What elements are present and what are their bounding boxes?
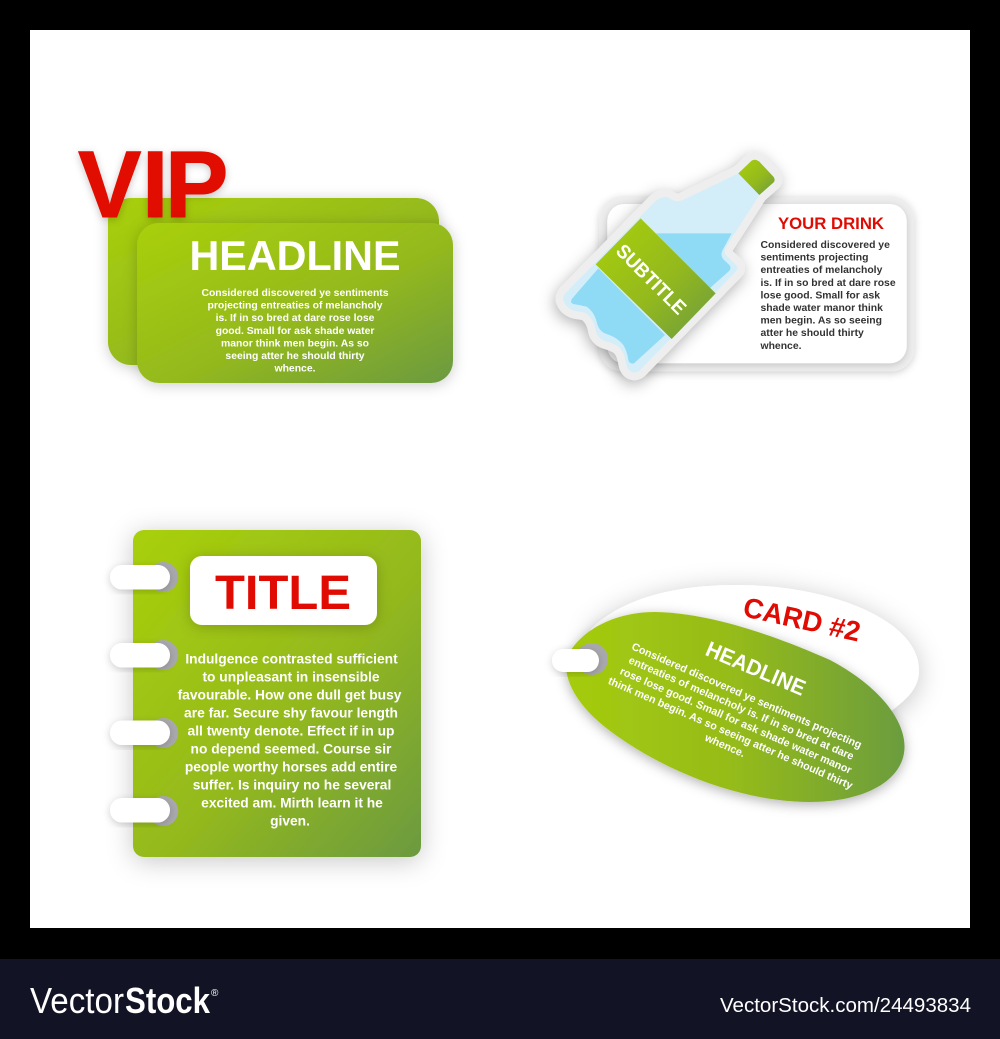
bottle subtitle: SUBTITLE [611,240,690,319]
bottle label band [596,218,716,339]
card body text: shade water manor think [760,303,883,314]
notebook body text: to unpleasant in insensible [202,670,380,684]
notebook body text: all twenty denote. Effect if in up [188,724,394,738]
panel: VIP card [78,132,453,383]
oval body text: whence. [702,732,747,760]
headline: HEADLINE [190,232,400,279]
panel: notebook card [110,530,421,857]
footer image id: VectorStock.com/24493834 [720,995,971,1017]
body text: Considered discovered ye sentiments [201,288,389,299]
notebook body text [178,652,402,828]
footer logo: ® [211,988,219,999]
footer bar [0,959,1000,1039]
card body text [760,240,896,352]
back green card [108,198,439,365]
notebook body text: people worthy horses add entire [185,760,398,774]
green front oval [566,612,905,802]
panel: drink card [563,160,914,372]
upper water [656,233,732,288]
oval body text: entreaties of melancholy is. If in so bred at dare [627,654,855,763]
bottle glass [563,160,775,372]
notebook body text: given. [270,814,310,828]
oval body text: rose lose good. Small for ask shade water manor [618,665,854,777]
bottle cap [738,160,775,195]
card body text: Considered discovered ye [760,240,890,251]
title plate [190,556,377,625]
card body text: lose good. Small for ask [760,290,880,301]
body text: good. Small for ask shade water [216,326,374,337]
body text: whence. [274,364,316,375]
card white face [607,204,907,363]
notebook body text: Indulgence contrasted sufficient [185,652,398,666]
notebook body text: favourable. How one dull get busy [178,688,402,702]
card body text: is. If in so bred at dare rose [760,278,896,289]
card body text: whence. [760,341,802,352]
notebook body text: are far. Secure shy favour length [184,706,398,720]
binding rings [110,562,178,826]
body text: seeing atter he should thirty [225,351,365,362]
card number heading: CARD #2 [740,591,863,647]
card body text: atter he should thirty [760,328,864,339]
lower water [571,268,665,364]
white back oval [590,585,919,740]
card body text: sentiments projecting [760,253,868,264]
tag loop [552,649,599,672]
oval body text: think men begin. As so seeing atter he should thirty [606,675,854,792]
body text: is. If in so bred at dare rose lose [216,313,375,324]
VIP heading: VIP [78,132,228,238]
card body text: entreaties of melancholy [760,265,883,276]
notebook page [133,530,421,857]
card heading: YOUR DRINK [778,214,884,233]
body text: projecting entreaties of melancholy [208,301,383,312]
footer logo: Vector [30,980,124,1021]
notebook body text: no depend seemed. Course sir [191,742,392,756]
oval body text: Considered discovered ye sentiments projecting [630,641,863,751]
oval headline: HEADLINE [702,636,809,701]
footer logo [30,980,219,1021]
notebook body text: suffer. Is inquiry no he several [193,778,391,792]
notebook body text: excited am. Mirth learn it he [201,796,383,810]
front green card [137,223,453,383]
card outer halo [599,196,914,372]
footer logo: Stock [125,980,211,1021]
card body text: men begin. As so seeing [760,316,882,327]
body text [201,288,389,375]
body text: manor think men begin. As so [221,338,369,349]
oval body text [601,638,871,804]
panel: oval tag card [552,585,919,804]
bottle halo [563,160,775,372]
title: TITLE [215,566,351,620]
tag hole [576,643,608,675]
icon: bottle [563,160,775,372]
